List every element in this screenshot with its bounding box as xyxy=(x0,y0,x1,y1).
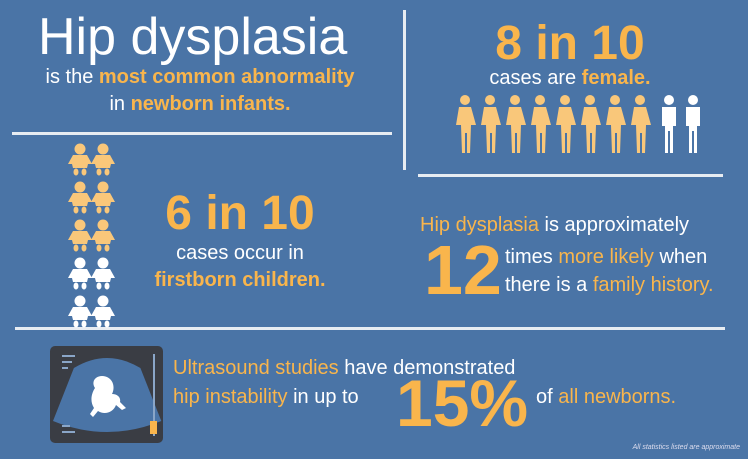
text: ultrasound: Ultrasound studies have demonstrated xyxy=(173,357,515,379)
stat: 8 in 10: 8 in 10 xyxy=(495,17,645,70)
text: firstborn: cases occur in xyxy=(176,242,304,264)
text: cases are female: cases are female. xyxy=(489,67,651,89)
icon: ultrasound xyxy=(50,346,163,443)
title: Hip dysplasia xyxy=(38,8,347,66)
text: family history: Hip dysplasia is approximately xyxy=(420,214,689,236)
text: there is a family history. xyxy=(505,274,714,296)
subtitle: is the most common abnormality xyxy=(46,66,354,88)
icons: people xyxy=(456,95,700,153)
stat: 12: 12 xyxy=(424,231,502,309)
stat: 6 in 10: 6 in 10 xyxy=(165,187,315,240)
text: times more likely when xyxy=(505,246,707,268)
text: ultrasound xyxy=(173,357,515,408)
text: firstborn xyxy=(154,242,326,291)
footnote: All statistics listed are approximate xyxy=(633,444,740,451)
text: of all newborns. xyxy=(536,386,676,408)
icons: babies xyxy=(68,144,115,328)
text: ultrasound: hip instability in up to xyxy=(173,386,359,408)
stat: 15%: 15% xyxy=(396,366,528,440)
subtitle xyxy=(46,66,354,115)
text: firstborn: firstborn children. xyxy=(154,269,326,291)
subtitle: in newborn infants. xyxy=(109,93,291,115)
